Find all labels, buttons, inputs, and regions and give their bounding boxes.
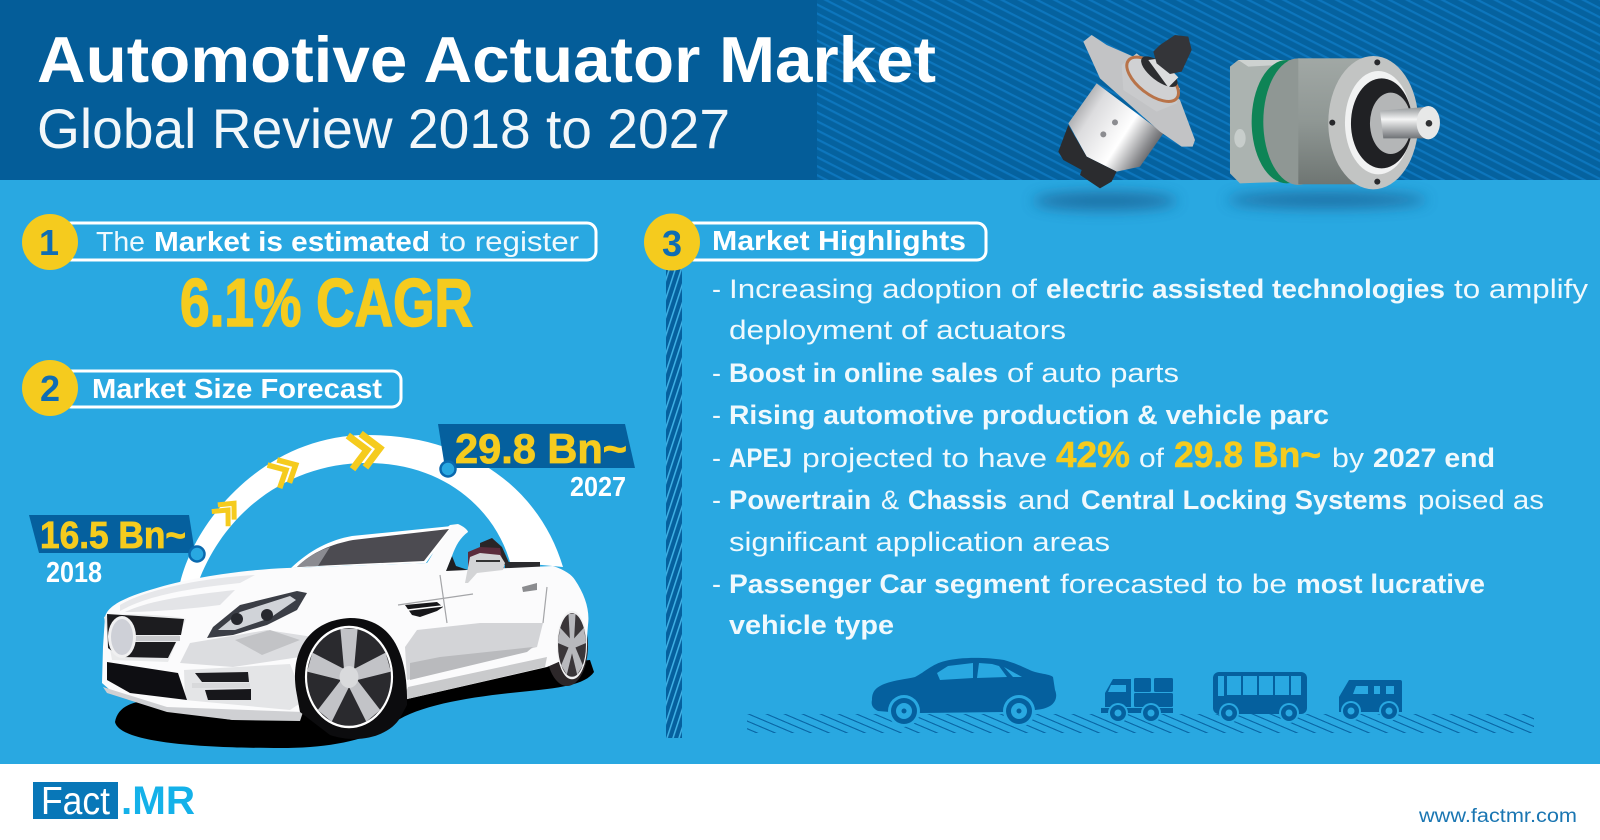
highlight 5: & bbox=[881, 485, 899, 515]
label 2027 value: 29.8 Bn~ bbox=[455, 425, 627, 472]
heading box 1 bbox=[62, 223, 596, 260]
heading text 2: Market Size Forecast bbox=[92, 373, 382, 404]
heading text 1: to register bbox=[440, 226, 579, 257]
chevrons small bbox=[212, 496, 242, 526]
label 2018 value: 16.5 Bn~ bbox=[40, 515, 186, 557]
highlight 3: Rising automotive production & vehicle parc bbox=[729, 400, 1329, 430]
highlight 6: forecasted to be bbox=[1060, 569, 1287, 599]
road hatch bbox=[747, 714, 1534, 733]
highlight 4 bbox=[712, 434, 1495, 475]
front wheel bbox=[295, 618, 407, 739]
highlight 2: - bbox=[712, 358, 721, 388]
highlight 5: Central Locking Systems bbox=[1081, 485, 1407, 515]
footer band bbox=[0, 764, 1600, 840]
highlight 3: - bbox=[712, 400, 721, 430]
image: idle air actuator bbox=[1058, 35, 1195, 188]
highlight 5: significant application areas bbox=[729, 527, 1110, 557]
highlight 1: - bbox=[712, 274, 721, 304]
growth arc bbox=[180, 435, 563, 583]
label 2018 year: 2018 bbox=[46, 557, 102, 589]
header banner bbox=[0, 0, 1600, 180]
highlight 1: Increasing adoption of bbox=[729, 274, 1038, 304]
highlight 5: - bbox=[712, 485, 721, 515]
illustration: white convertible car bbox=[102, 524, 594, 748]
icon: passenger car bbox=[872, 658, 1056, 727]
badge 1: 1 bbox=[39, 222, 59, 263]
chevrons medium bbox=[268, 453, 302, 488]
highlight 5: Chassis bbox=[908, 485, 1007, 515]
highlight 1 bbox=[712, 274, 1589, 345]
heading text 1 bbox=[96, 226, 579, 257]
highlight 1: deployment of actuators bbox=[729, 315, 1066, 345]
highlight 6: - bbox=[712, 569, 721, 599]
subtitle: Global Review 2018 to 2027 bbox=[37, 97, 730, 160]
logo: Fact.MR: Fact bbox=[41, 780, 110, 823]
highlight 4: APEJ bbox=[729, 443, 792, 473]
title: Automotive Actuator Market bbox=[37, 23, 936, 96]
section 1: CAGR bbox=[22, 214, 596, 341]
product shadows bbox=[1033, 192, 1427, 210]
highlight 6 bbox=[712, 569, 1485, 640]
highlight 4: 29.8 Bn~ bbox=[1174, 434, 1321, 475]
highlight 6: vehicle type bbox=[729, 610, 894, 640]
heading text 1: The bbox=[96, 226, 145, 257]
highlight 1: to amplify bbox=[1454, 274, 1589, 304]
marker 2027 bbox=[440, 462, 456, 476]
highlight 5: Powertrain bbox=[729, 485, 871, 515]
badge 2: 2 bbox=[40, 368, 60, 409]
highlight 2: of auto parts bbox=[1007, 358, 1179, 388]
background panel bbox=[0, 180, 1600, 764]
badge 3: 3 bbox=[662, 223, 682, 264]
heading box 3 bbox=[684, 223, 986, 260]
section 3: market highlights bbox=[644, 214, 1589, 738]
highlight 5: poised as bbox=[1418, 485, 1544, 515]
icon: truck bbox=[1101, 678, 1173, 723]
heading text 1: Market is estimated bbox=[154, 226, 430, 257]
heading text 3: Market Highlights bbox=[712, 225, 966, 256]
highlight 4: of bbox=[1139, 443, 1165, 473]
highlight 4: 2027 end bbox=[1373, 443, 1495, 473]
hatched vertical bar bbox=[666, 268, 682, 738]
highlight 4: 42% bbox=[1056, 434, 1130, 475]
highlight 1: electric assisted technologies bbox=[1046, 274, 1445, 304]
highlight 6: most lucrative bbox=[1296, 569, 1485, 599]
highlight 4: - bbox=[712, 443, 721, 473]
badge 1 bbox=[22, 214, 78, 270]
badge 2 bbox=[22, 360, 78, 416]
logo: Fact.MR bbox=[33, 779, 195, 823]
highlight 2: Boost in online sales bbox=[729, 358, 998, 388]
heading box 2 bbox=[62, 371, 401, 407]
rear wheel bbox=[557, 612, 587, 678]
icon: bus bbox=[1213, 672, 1307, 723]
label 2027 year: 2027 bbox=[570, 471, 626, 502]
website: www.factmr.com bbox=[1418, 806, 1577, 827]
section 2: market size forecast bbox=[22, 360, 635, 748]
highlight 5 bbox=[712, 485, 1544, 557]
icon: van bbox=[1339, 680, 1402, 721]
highlight 2 bbox=[712, 358, 1179, 388]
logo: Fact.MR: .MR bbox=[121, 779, 195, 823]
marker 2018 bbox=[190, 546, 204, 562]
chevrons large bbox=[348, 431, 382, 469]
highlight 4: projected to have bbox=[802, 443, 1047, 473]
highlight 4: by bbox=[1332, 443, 1365, 473]
CAGR value: 6.1% CAGR bbox=[180, 265, 473, 341]
image: planetary gear actuator bbox=[1230, 56, 1440, 189]
badge 3 bbox=[644, 214, 700, 270]
highlight 6: Passenger Car segment bbox=[729, 569, 1050, 599]
highlight 5: and bbox=[1018, 485, 1070, 515]
